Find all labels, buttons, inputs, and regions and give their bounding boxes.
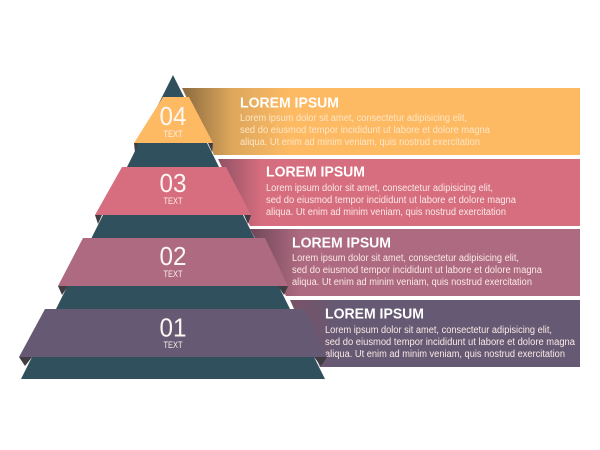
pyramid [19, 75, 327, 379]
banner 02 body text: aliqua. Ut enim ad minim veniam, quis nostrud exercitation [292, 277, 532, 288]
banner 01 body text: Lorem ipsum dolor sit amet, consectetur adipisicing elit, [325, 325, 552, 336]
banner 04 [182, 88, 580, 155]
tier 01: 01 [160, 314, 186, 342]
tier 04: 04 [160, 103, 186, 131]
tier 04: TEXT [164, 129, 183, 139]
banner 01 body text: aliqua. Ut enim ad minim veniam, quis nostrud exercitation [325, 349, 565, 360]
tier 02: 02 [160, 243, 186, 271]
banner 02 [250, 229, 580, 296]
banner 03 body text: sed do eiusmod tempor incididunt ut labore et dolore magna [266, 195, 516, 206]
tier 04 [134, 97, 213, 143]
banner 02 body text: sed do eiusmod tempor incididunt ut labore et dolore magna [292, 265, 542, 276]
banner 03 [218, 159, 580, 226]
tier 01 [19, 309, 327, 357]
banner 04 body text: sed do eiusmod tempor incididunt ut labore et dolore magna [240, 125, 490, 136]
pyramid dark base [21, 75, 325, 379]
tier 01: TEXT [164, 340, 183, 350]
tier 03: TEXT [164, 196, 183, 206]
banner 01 body text: sed do eiusmod tempor incididunt ut labore et dolore magna [325, 337, 575, 348]
banner 03 body text: aliqua. Ut enim ad minim veniam, quis nostrud exercitation [266, 207, 506, 218]
tier 03 [95, 167, 251, 215]
banner 04 heading: LOREM IPSUM [240, 96, 339, 112]
fold shadows [19, 143, 327, 366]
tier 02: TEXT [164, 269, 183, 279]
banner 01 [290, 300, 580, 367]
banner 03 heading: LOREM IPSUM [266, 164, 365, 180]
tier 02 [58, 238, 288, 286]
banner 04 body text: aliqua. Ut enim ad minim veniam, quis nostrud exercitation [240, 137, 480, 148]
banner 02 body text: Lorem ipsum dolor sit amet, consectetur adipisicing elit, [292, 253, 519, 264]
banner 04 body text: Lorem ipsum dolor sit amet, consectetur adipisicing elit, [240, 113, 467, 124]
banner 01 heading: LOREM IPSUM [325, 306, 424, 322]
tier 03: 03 [160, 170, 186, 198]
banner 02 heading: LOREM IPSUM [292, 236, 391, 252]
banner 03 body text: Lorem ipsum dolor sit amet, consectetur adipisicing elit, [266, 183, 493, 194]
